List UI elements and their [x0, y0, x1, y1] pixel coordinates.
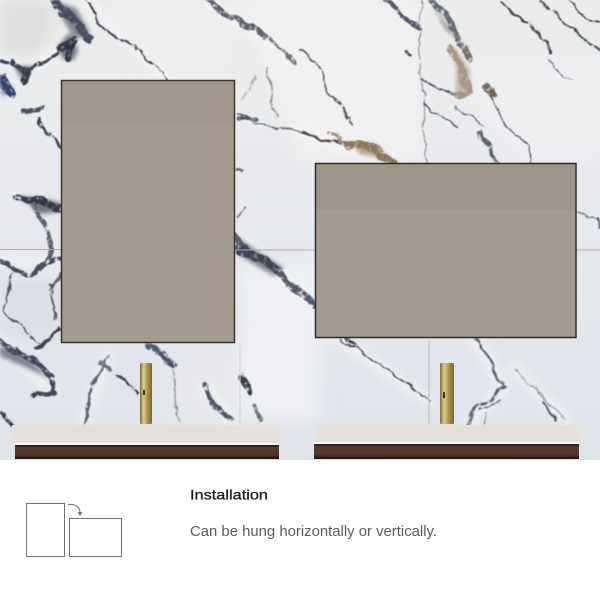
- description: Can be hung horizontally or vertically.: [190, 524, 437, 540]
- caption panel: [0, 460, 600, 600]
- right vanity: [314, 425, 581, 459]
- right mirror (landscape): [316, 164, 576, 338]
- heading: Installation: [190, 486, 268, 502]
- marble wall photo: [0, 0, 600, 460]
- right faucet: [440, 363, 454, 424]
- marble vein halos: [0, 0, 565, 424]
- icon: portrait and landscape rotation: [26, 504, 122, 556]
- left faucet: [140, 363, 152, 424]
- grout lines: [0, 250, 600, 424]
- left vanity: [12, 425, 281, 459]
- marble vein shading: [0, 0, 470, 378]
- left mirror (portrait): [62, 80, 234, 342]
- marble veins: [0, 0, 600, 425]
